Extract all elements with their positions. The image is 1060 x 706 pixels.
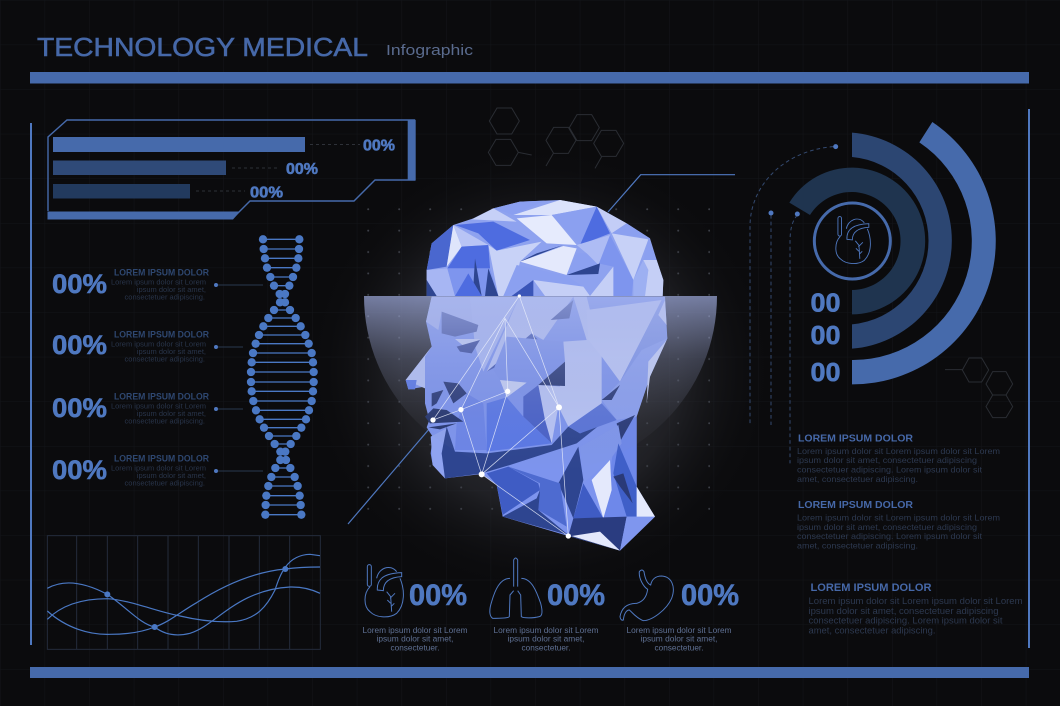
top bar <box>30 72 1029 84</box>
subtitle: Infographic <box>386 42 474 59</box>
translucent dome scan plane <box>364 296 717 473</box>
radial arc chart <box>750 122 996 463</box>
organ stat: lungs: ipsum dolor sit amet, <box>508 634 584 644</box>
organ stat: heart: consectetuer. <box>390 644 440 652</box>
stat row 4: ipsum dolor sit amet, <box>137 471 206 480</box>
organ stat: heart: 00% <box>409 579 467 612</box>
title: TECHNOLOGY MEDICAL <box>37 32 368 62</box>
text block 3: amet, consectetuer adipiscing. <box>808 626 936 636</box>
stat row 3 <box>52 392 243 426</box>
stat row 4 <box>52 454 263 488</box>
organ stat: stomach: ipsum dolor sit amet, <box>640 634 718 644</box>
arc: inner <box>789 168 925 314</box>
organ stat: heart <box>362 565 468 652</box>
bar 1: 00% <box>363 138 395 154</box>
icon: heart in ring <box>814 203 890 279</box>
stat row 2 <box>52 330 243 364</box>
bar 1 <box>53 137 395 154</box>
arc values <box>810 288 840 387</box>
text block 3: consectetuer adipiscing. Lorem ipsum dolor sit <box>808 616 1003 626</box>
facial mesh overlay <box>430 294 571 539</box>
organ stat: stomach: Lorem ipsum dolor sit Lorem <box>626 626 732 635</box>
text block 2: LOREM IPSUM DOLOR <box>798 499 913 511</box>
stat row 4: LOREM IPSUM DOLOR <box>114 454 209 464</box>
stat row 4: Lorem ipsum dolor sit Lorem <box>111 464 206 472</box>
text block 1: Lorem ipsum dolor sit Lorem ipsum dolor sit Lorem <box>797 446 1000 456</box>
stat row 3: Lorem ipsum dolor sit Lorem <box>111 402 206 410</box>
text block 2: ipsum dolor sit amet, consectetuer adipiscing <box>797 522 977 532</box>
organ stat: lungs <box>490 558 605 652</box>
stat row 1: Lorem ipsum dolor sit Lorem <box>111 278 206 286</box>
connector line lower left of head <box>348 428 430 524</box>
text block 1: amet, consectetuer adipiscing. <box>797 474 918 484</box>
organ stat: lungs: 00% <box>547 579 605 612</box>
molecule hexagons right <box>945 358 1013 418</box>
bar 3 <box>53 184 283 202</box>
text block 1: LOREM IPSUM DOLOR <box>798 432 913 444</box>
stat row 4: consectetuer adipiscing. <box>125 478 205 488</box>
panel: left statistics <box>52 268 263 488</box>
stat row 2: LOREM IPSUM DOLOR <box>114 330 209 340</box>
text block 3 <box>808 582 1022 636</box>
text block 2: consectetuer adipiscing. Lorem ipsum dolor sit <box>797 531 983 541</box>
icon: stomach <box>620 570 673 621</box>
stat row 3: LOREM IPSUM DOLOR <box>114 392 209 402</box>
icon: lungs <box>490 558 542 618</box>
molecule hexagons top <box>488 108 624 168</box>
panel: organ statistics <box>362 558 739 652</box>
bottom bar <box>30 667 1029 678</box>
icon: heart <box>365 565 403 617</box>
organ stat: stomach <box>620 570 739 652</box>
arc values: 00 <box>810 288 840 318</box>
head lower faces <box>406 297 667 551</box>
text block 3: LOREM IPSUM DOLOR <box>810 582 932 594</box>
organ stat: stomach: 00% <box>681 579 739 612</box>
organ stat: heart: Lorem ipsum dolor sit Lorem <box>362 626 468 635</box>
panel: bar chart <box>48 120 416 220</box>
polygonal head <box>406 200 667 551</box>
stat row 3: ipsum dolor sit amet, <box>137 409 206 418</box>
organ stat: lungs: consectetuer. <box>522 644 570 652</box>
stat row 3: consectetuer adipiscing. <box>125 416 205 426</box>
stat row 4: 00% <box>52 455 107 485</box>
text block 2: Lorem ipsum dolor sit Lorem ipsum dolor sit Lorem <box>797 512 1000 522</box>
stat row 1: LOREM IPSUM DOLOR <box>114 268 209 278</box>
text block 1: ipsum dolor sit amet, consectetuer adipiscing <box>797 455 977 465</box>
bar 2: 00% <box>286 161 318 178</box>
stat row 1 <box>52 268 263 302</box>
left vertical rule <box>30 123 32 645</box>
right vertical rule <box>1028 109 1030 648</box>
bar 3: 00% <box>250 184 283 202</box>
arc: middle <box>852 133 952 349</box>
text block 1: consectetuer adipiscing. Lorem ipsum dolor sit <box>797 464 983 474</box>
stat row 2: ipsum dolor sit amet, <box>137 347 206 356</box>
dashed connectors <box>750 147 833 463</box>
bar panel frame <box>48 120 416 220</box>
arc values: 00 <box>810 320 840 350</box>
arc: outer <box>852 122 996 384</box>
text block 1 <box>797 432 1000 484</box>
stat row 3: 00% <box>52 393 107 423</box>
stat row 1: consectetuer adipiscing. <box>125 292 205 302</box>
stat row 2: consectetuer adipiscing. <box>125 354 205 364</box>
line chart <box>47 536 320 649</box>
organ stat: lungs: Lorem ipsum dolor sit Lorem <box>494 626 599 635</box>
stat row 1: 00% <box>52 269 107 299</box>
stat row 1: ipsum dolor sit amet, <box>137 285 206 294</box>
head top faces <box>427 200 663 296</box>
stat row 2: Lorem ipsum dolor sit Lorem <box>111 340 206 348</box>
icon: DNA helix <box>247 235 318 519</box>
stat row 2: 00% <box>52 330 107 360</box>
bar 2 <box>53 160 318 178</box>
text block 3: Lorem ipsum dolor sit Lorem ipsum dolor sit Lorem <box>808 596 1022 606</box>
organ stat: heart: ipsum dolor sit amet, <box>376 634 454 644</box>
text block 2 <box>797 499 1000 550</box>
organ stat: stomach: consectetuer. <box>654 644 704 652</box>
text block 3: ipsum dolor sit amet, consectetuer adipiscing <box>808 606 998 616</box>
arc values: 00 <box>810 357 840 387</box>
text block 2: amet, consectetuer adipiscing. <box>797 540 918 550</box>
connector line top right of head <box>608 175 735 212</box>
